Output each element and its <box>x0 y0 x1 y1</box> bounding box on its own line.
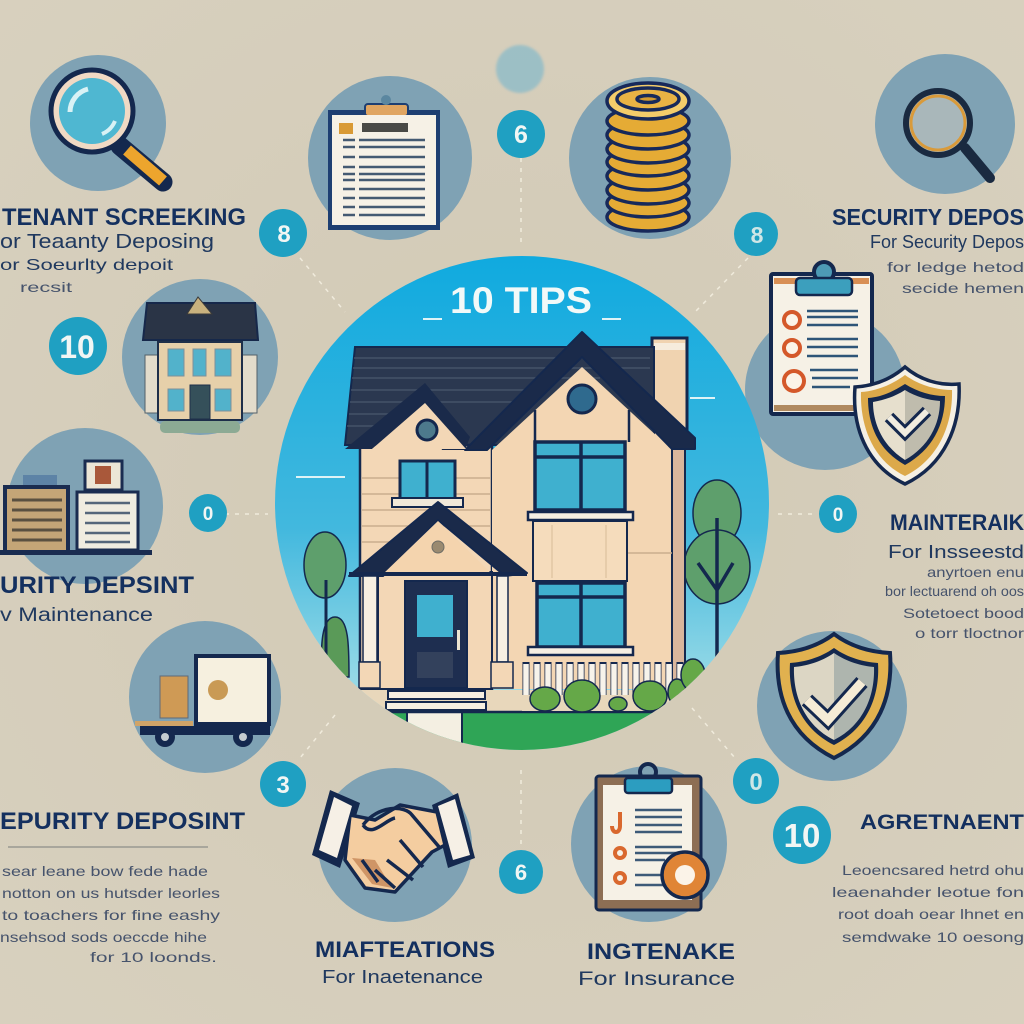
panel: checklist bottom <box>571 764 727 922</box>
number badge: 0 right <box>819 495 857 533</box>
panel: shield checklist <box>745 262 959 484</box>
panel: tenant screening <box>0 55 246 295</box>
body text: right: o torr tloctnor <box>915 625 1024 641</box>
number badge: 0 bottom right <box>733 758 779 804</box>
number badge: 3 bottom left: 3 <box>276 772 290 799</box>
panel: magnifier right <box>875 54 1015 194</box>
body text: right: Sotetoect bood <box>903 605 1024 621</box>
number badge: 10 left <box>49 317 107 375</box>
panel: lease document <box>308 76 472 240</box>
body text: bottom left: to toachers for fine eashy <box>2 907 220 923</box>
number badge: 10 left: 10 <box>59 329 95 365</box>
panel: documents left <box>0 428 163 584</box>
house body <box>345 332 695 712</box>
decorative dot <box>496 45 544 93</box>
number badge: 6 top: 6 <box>514 121 528 149</box>
body text: bottom right <box>832 862 1024 945</box>
number badge: 0 left: 0 <box>203 504 213 525</box>
body text: right: bor lectuarend oh oos <box>885 583 1024 599</box>
trees <box>304 480 750 680</box>
subheading: maintenance: v Maintenance <box>0 605 153 626</box>
heading: maintenance right: MAINTERAIK <box>890 510 1024 535</box>
number badge: 6 bottom: 6 <box>515 860 527 885</box>
body text: bottom right: Leoencsared hetrd ohu <box>842 862 1024 878</box>
detail text: or Soeurlty depoit <box>0 257 174 274</box>
heading: security deposit bottom: EPURITY DEPOSINT <box>0 808 245 835</box>
number badge: 6 top <box>497 110 545 158</box>
body text: bottom left <box>0 863 220 965</box>
heading: maintenance: MIAFTEATIONS <box>315 937 495 962</box>
body text: right <box>885 564 1024 641</box>
heading: tenant screening: TENANT SCREEKING <box>2 204 246 231</box>
fence and shrubs <box>522 659 705 712</box>
title: 10 TIPS <box>450 280 592 321</box>
body text: bottom left: for 10 loonds. <box>90 949 217 965</box>
number badge: 3 bottom left <box>260 761 306 807</box>
panel: shield check <box>757 631 907 781</box>
number badge: 0 left <box>189 494 227 532</box>
detail text: right: secide hemen <box>902 280 1024 296</box>
subheading: insurance: For Insurance <box>578 969 735 990</box>
panel: coin stack <box>569 77 731 239</box>
icon: handshake <box>312 768 475 922</box>
number badge: 0 right: 0 <box>833 505 843 526</box>
subheading: security: For Security Depos <box>870 232 1024 252</box>
number badge: 8 top right: 8 <box>751 222 764 248</box>
number badge: 10 bottom right: 10 <box>784 817 820 854</box>
number badge: 0 bottom right: 0 <box>749 769 763 796</box>
number badge: 8 top left: 8 <box>277 221 291 248</box>
body text: bottom left: sear leane bow fede hade <box>2 863 208 879</box>
body text: bottom right: leaenahder leotue fon <box>832 884 1024 900</box>
number badge: 8 top left <box>259 209 307 257</box>
body text: bottom right: semdwake 10 oesong <box>842 929 1024 945</box>
heading: agreement: AGRETNAENT <box>860 811 1024 834</box>
subheading: inspection: For Insseestd <box>888 542 1024 562</box>
body text: right: anyrtoen enu <box>927 564 1024 580</box>
number badge: 10 bottom right <box>773 806 831 864</box>
number badge: 6 bottom <box>499 850 543 894</box>
icon: magnifying glass <box>30 55 166 191</box>
subheading: maintenance: For Inaetenance <box>322 967 483 987</box>
panel: truck <box>129 621 281 773</box>
heading: insurance: INGTENAKE <box>587 939 735 964</box>
body text: bottom left: notton on us hutsder leorles <box>2 885 220 901</box>
sky streaks <box>296 319 715 477</box>
number badge: 8 top right <box>734 212 778 256</box>
body text: bottom left: nsehsod sods oeccde hihe <box>0 929 207 945</box>
icon: shield <box>855 367 959 484</box>
panel: house small <box>122 279 278 435</box>
lawn <box>390 712 654 750</box>
detail text: right <box>887 259 1024 296</box>
subheading: or Teaanty Deposing <box>0 231 214 253</box>
heading: security deposit left: URITY DEPSINT <box>0 572 194 599</box>
center circle: house <box>260 256 780 762</box>
detail text: recsit <box>20 279 72 295</box>
body text: bottom right: root doah oear lhnet en <box>838 906 1024 922</box>
detail text: right: for ledge hetod <box>887 259 1024 275</box>
